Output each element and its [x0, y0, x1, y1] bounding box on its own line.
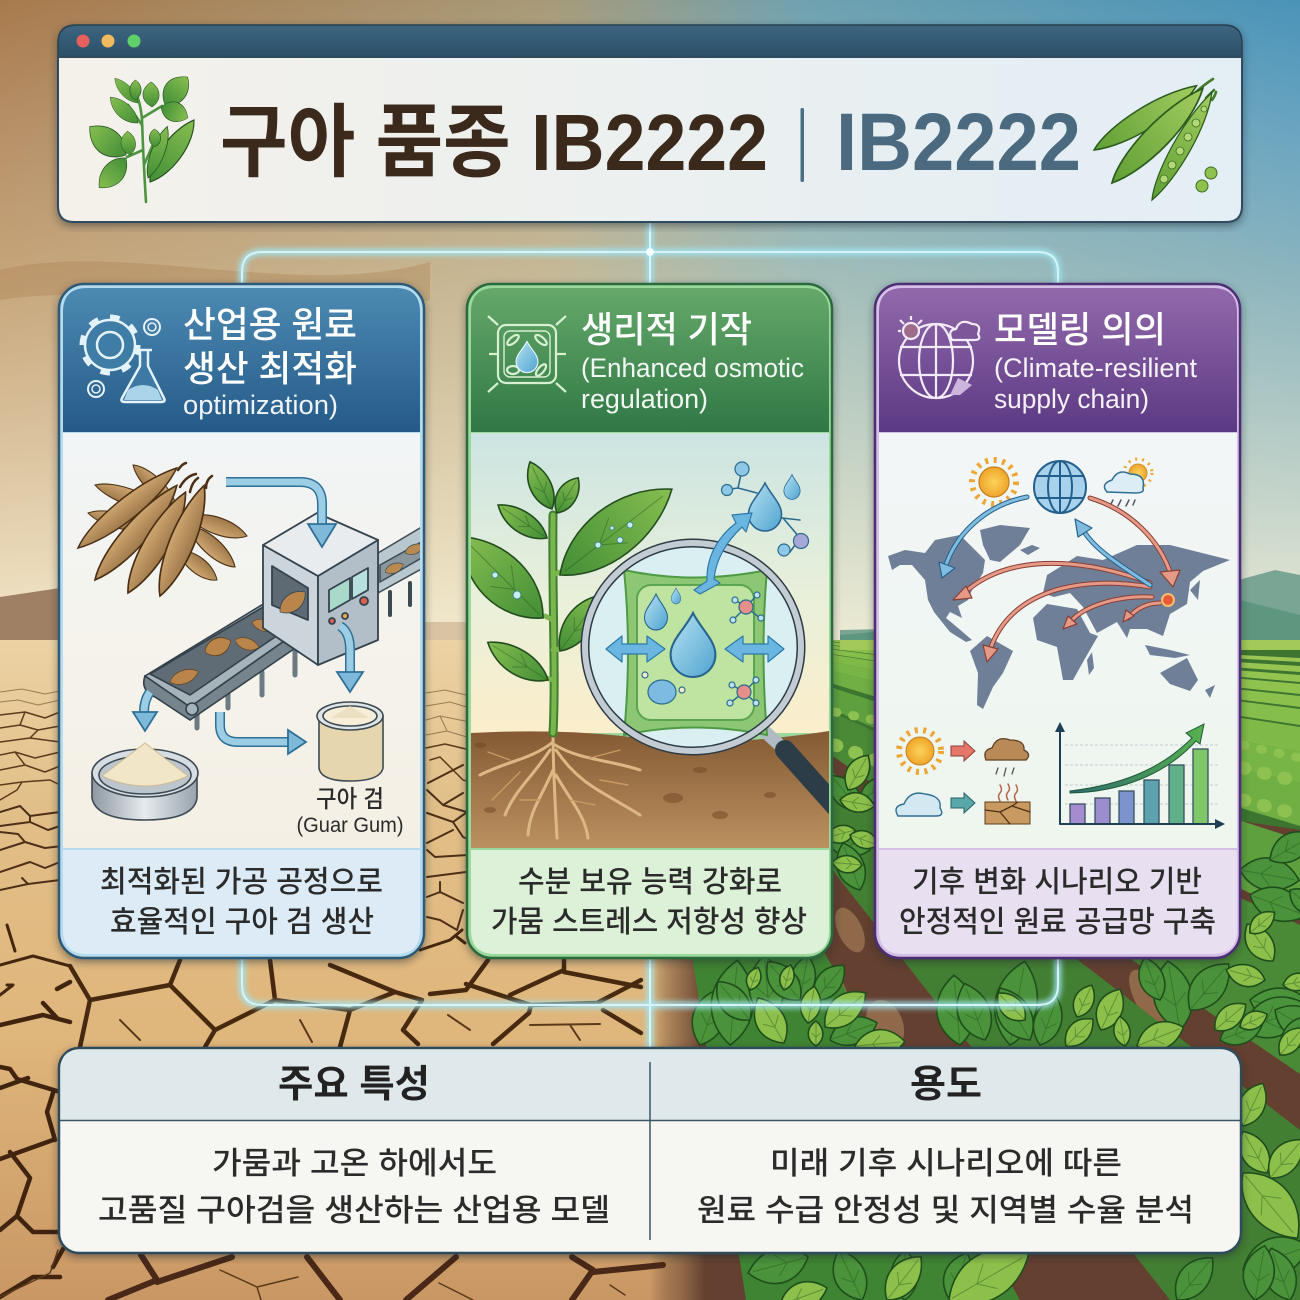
conveyor belt — [144, 600, 307, 728]
key traits text line two: 고품질 구아검을 생산하는 산업용 모델 — [98, 1193, 610, 1228]
guar pods — [71, 459, 250, 600]
panel title second line: 생산 최적화 — [183, 348, 357, 389]
magnified cell — [624, 570, 767, 735]
illustration: climate map and yield chart — [888, 459, 1230, 829]
panel: physiological mechanism — [444, 284, 835, 958]
panel: industrial raw material optimization — [59, 284, 425, 958]
icon: sun to dust cloud — [899, 730, 1029, 776]
panel title: 산업용 원료 — [183, 304, 357, 345]
molecules — [642, 462, 808, 706]
panel frame — [875, 284, 1240, 958]
magnifier ring — [585, 543, 801, 751]
connector lines between panels — [242, 222, 1058, 1048]
conveyor behind machine — [378, 527, 420, 617]
illustration: plant, roots and magnified cell — [444, 458, 835, 848]
uses text line one: 미래 기후 시나리오에 따른 — [770, 1146, 1122, 1181]
icon: cloud to cracked ground — [896, 784, 1030, 824]
panel caption line one: 최적화된 가공 공정으로 — [100, 866, 383, 899]
green field rows — [640, 625, 1300, 1300]
processing machine — [263, 513, 378, 665]
window control dots — [76, 34, 140, 48]
column heading: key traits: 주요 특성 — [278, 1064, 430, 1106]
world map — [888, 525, 1230, 709]
header window panel — [58, 25, 1242, 222]
guar gum cup — [317, 702, 383, 781]
panel header — [879, 288, 1237, 432]
window body — [58, 57, 1242, 222]
roots — [480, 733, 640, 838]
panel frame — [467, 284, 832, 958]
panel subtitle second line: supply chain) — [994, 384, 1149, 414]
blue process arrows — [133, 482, 363, 754]
icon: globe with climate symbols — [898, 316, 979, 398]
panel caption line two: 가뭄 스트레스 저항성 향상 — [491, 906, 807, 939]
summary table — [59, 1048, 1241, 1253]
icon: plant cell with water drop — [488, 316, 566, 392]
drought cracks — [0, 689, 663, 1300]
leaves — [471, 460, 673, 682]
icon: globe — [1034, 461, 1086, 513]
bar chart: rising yield — [1055, 722, 1225, 829]
label: guar gum: 구아 검 — [316, 786, 384, 813]
illustration: guar processing line — [71, 459, 425, 837]
window title bar — [58, 25, 1242, 57]
key traits text line one: 가뭄과 고온 하에서도 — [212, 1146, 497, 1181]
icon: sun behind rain cloud — [1104, 459, 1152, 506]
panel title: 생리적 기작 — [581, 309, 752, 350]
panel caption line two: 안정적인 원료 공급망 구축 — [899, 906, 1216, 939]
guar gum powder bowl — [92, 743, 198, 820]
panel caption line two: 효율적인 구아 검 생산 — [110, 906, 374, 939]
osmotic flow arrows — [606, 513, 784, 662]
water drops — [645, 475, 800, 677]
panel subtitle: (Enhanced osmotic — [581, 353, 804, 383]
panel caption line one: 수분 보유 능력 강화로 — [518, 866, 782, 899]
panel footer background — [471, 850, 829, 954]
panel footer background — [63, 850, 420, 954]
crop leaves — [684, 750, 1300, 1300]
panel caption line one: 기후 변화 시나리오 기반 — [912, 866, 1202, 899]
panel illustration background — [879, 433, 1237, 848]
magnifier handle — [760, 727, 785, 750]
icon: guar plant — [81, 69, 203, 202]
stem — [553, 515, 554, 733]
bumpy foliage along rows — [835, 712, 1300, 815]
icon: guar pods — [1088, 78, 1221, 204]
subtitle code: IB2222 — [836, 97, 1081, 188]
pods on belt — [170, 619, 268, 685]
panel illustration background — [63, 433, 420, 848]
soil — [471, 731, 829, 848]
icon: sun — [972, 460, 1016, 504]
column heading: uses: 용도 — [910, 1064, 982, 1106]
table dividers — [60, 1062, 1240, 1240]
panel subtitle: optimization) — [183, 390, 338, 420]
panel subtitle: (Climate-resilient — [994, 353, 1197, 383]
panel frame — [59, 284, 424, 958]
trade route arrows — [945, 497, 1171, 650]
icon: gears and flask — [84, 319, 165, 402]
title: 구아 품종 IB2222 — [220, 98, 768, 187]
title divider — [800, 108, 804, 182]
label: guar gum english: (Guar Gum) — [296, 814, 404, 837]
panel footer background — [879, 850, 1237, 954]
table frame — [59, 1048, 1241, 1253]
panel: modeling significance — [875, 284, 1240, 958]
panel title: 모델링 의의 — [994, 309, 1166, 350]
table header row — [61, 1050, 1239, 1120]
panel subtitle second line: regulation) — [581, 384, 708, 414]
panel illustration background — [471, 433, 829, 733]
panel header — [63, 288, 420, 432]
magnifier lens — [585, 543, 801, 751]
uses text line two: 원료 수급 안정성 및 지역별 수율 분석 — [697, 1193, 1194, 1228]
panel header — [471, 288, 829, 432]
